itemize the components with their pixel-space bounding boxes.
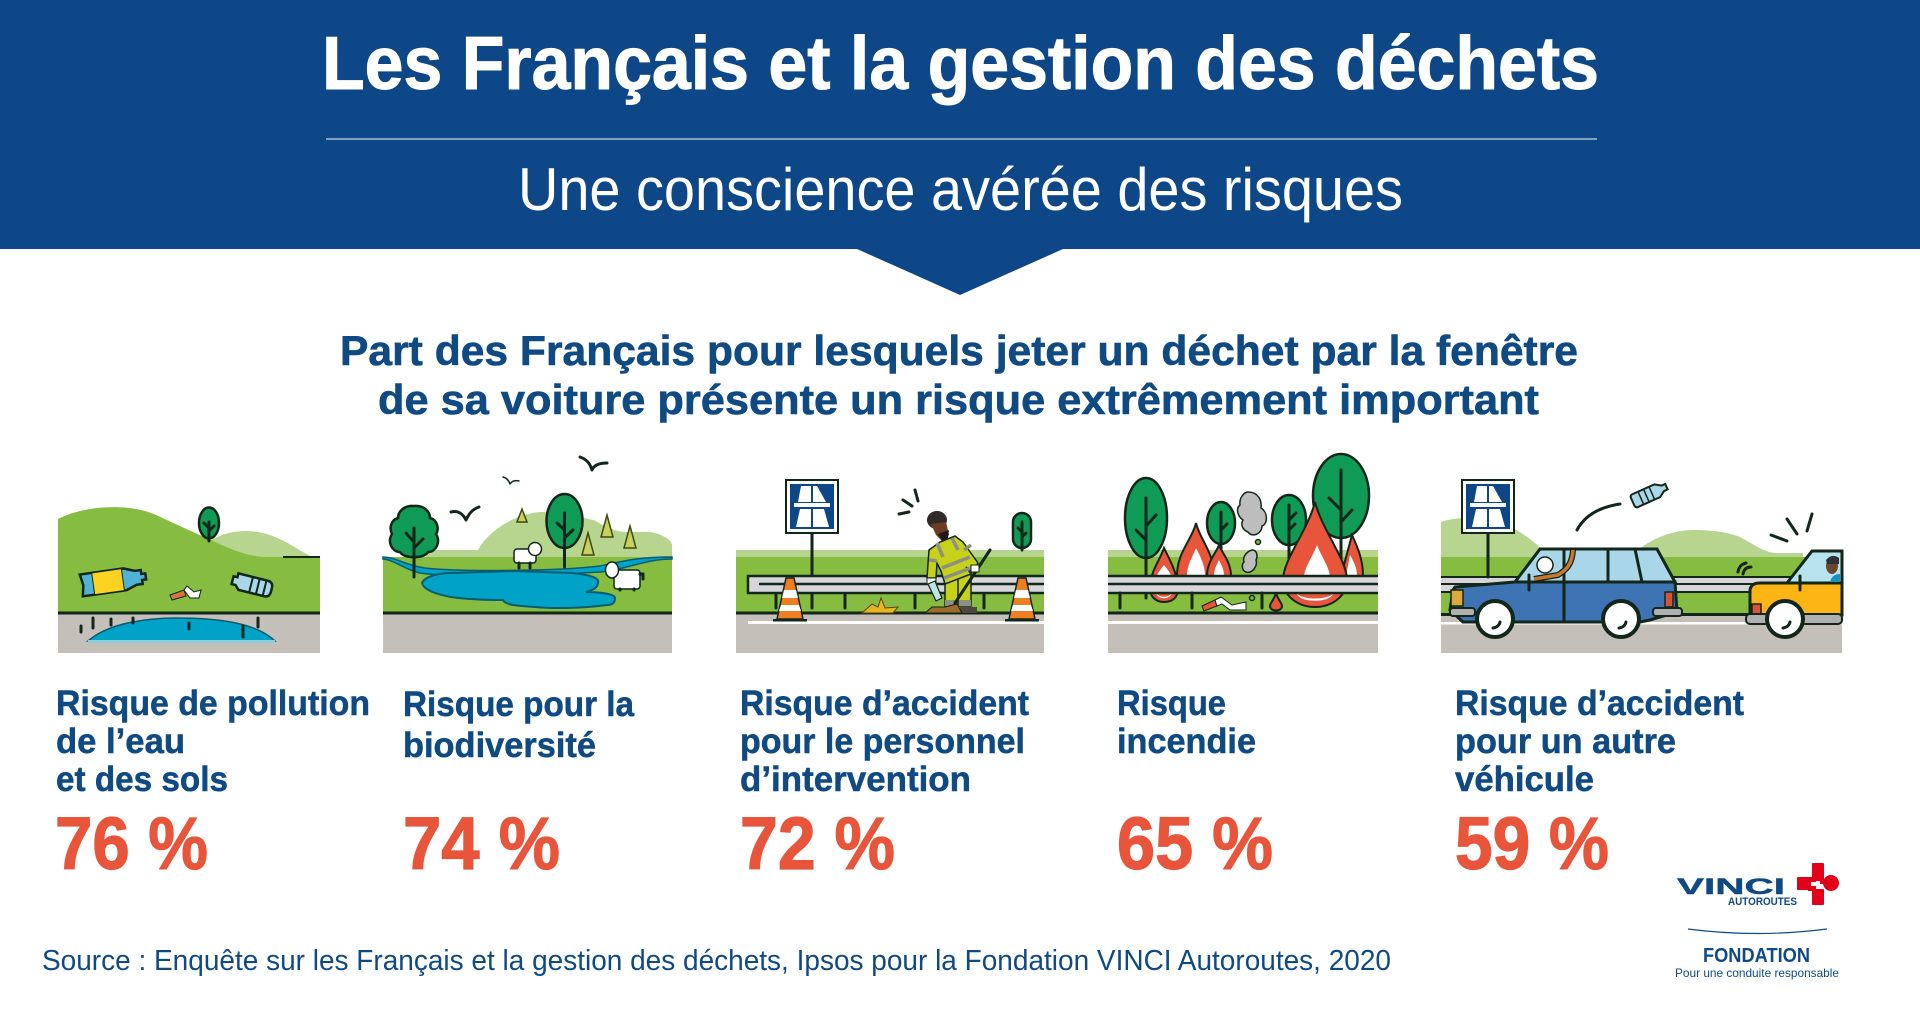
icon: yellow car [1746,551,1842,637]
icon: round tree [390,506,438,577]
label: véhicule [1455,760,1594,799]
icon: tree [199,508,219,541]
head [927,511,947,529]
VINCI wordmark: VINCI [1677,874,1785,899]
panel: biodiversité [383,457,672,885]
guard rail [1108,576,1378,608]
illustration: roadside fire [1108,454,1378,653]
label: Risque pour la [403,685,635,724]
autoroutes text: AUTOROUTES [1728,896,1797,908]
label: de l’eau [56,722,185,761]
icon: flames [1150,502,1363,610]
header banner [0,0,1920,295]
tagline: Pour une conduite responsable [1675,966,1839,980]
icon: smoke [1238,492,1266,600]
icon: blue car [1450,549,1682,637]
value: 76 % [55,802,208,885]
icon: motorway sign [786,480,838,533]
panel: accident pour un autre véhicule [1441,480,1842,885]
jacket and sleeves [927,536,978,584]
illustration: road worker by guard rail [736,480,1044,653]
main question heading: de sa voiture présente un risque extrêmement important [378,376,1539,423]
icon: cigarette butt [170,586,201,600]
label: Risque [1117,684,1226,723]
icon: traffic cone right [1005,578,1039,622]
illustration: pond, trees and sheep [383,457,672,653]
logo: VINCI Autoroutes Fondation [1675,863,1839,980]
title: Les Français et la gestion des déchets [322,21,1599,105]
icon: thrown bottle [1630,480,1669,508]
icon: yellow bottle [80,566,147,596]
icon: crushed bottle [231,572,273,598]
label: pour le personnel [740,722,1025,761]
label [740,684,1029,799]
value: 59 % [1455,802,1609,885]
alert ticks [1771,514,1812,541]
label: Risque d’accident [1455,684,1744,723]
bottle trajectory arrow [1577,504,1620,530]
label [56,684,370,799]
icon: tall tree [546,494,582,567]
label: Risque de pollution [56,684,370,723]
value: 72 % [740,802,895,885]
icon: birds [451,457,607,520]
source note: Source : Enquête sur les Français et la gestion des déchets, Ipsos pour la Fondation VINCI Autoroutes, 2020 [42,945,1391,977]
panel: pollution de l'eau et des sols [55,507,370,885]
grabber stick [955,550,990,603]
guard rail [748,576,1044,593]
bottle [928,581,942,601]
icon: tree [1013,513,1031,550]
label: pour un autre [1455,722,1676,761]
boots [960,607,977,613]
icon: trees [1125,454,1369,598]
icon: small pines [517,509,636,555]
fondation text: FONDATION [1703,945,1810,967]
panel: risque incendie [1108,454,1378,885]
main question heading [340,327,1578,423]
icon: sheep [514,542,542,568]
icon: motorway sign [1462,480,1514,577]
leaves [925,604,962,613]
illustration: cars on motorway [1441,480,1842,653]
label: Risque d’accident [740,684,1029,723]
illustration: hill with litter and groundwater [58,507,320,653]
value: 74 % [403,802,560,885]
label: et des sols [56,760,228,799]
panel: personnel d'intervention [736,480,1044,885]
skid marks [1738,563,1751,574]
label: d’intervention [740,760,971,799]
icon: worker [925,511,990,613]
label: biodiversité [403,726,596,765]
main question heading: Part des Français pour lesquels jeter un déchet par la fenêtre [340,327,1578,374]
label [403,685,635,765]
subtitle: Une conscience avérée des risques [518,156,1403,223]
red cross [1797,863,1839,905]
icon: sheep by pond [606,562,643,590]
icon: traffic cone left [773,578,807,622]
legs [945,570,971,606]
icon: cigarette butt [1202,597,1246,611]
label [1455,684,1744,799]
value: 65 % [1117,802,1273,885]
label: incendie [1117,722,1256,761]
icon: banana peel [862,598,898,613]
label [1117,684,1256,761]
icon: alert ticks [899,490,918,514]
guard rail [1441,577,1842,592]
